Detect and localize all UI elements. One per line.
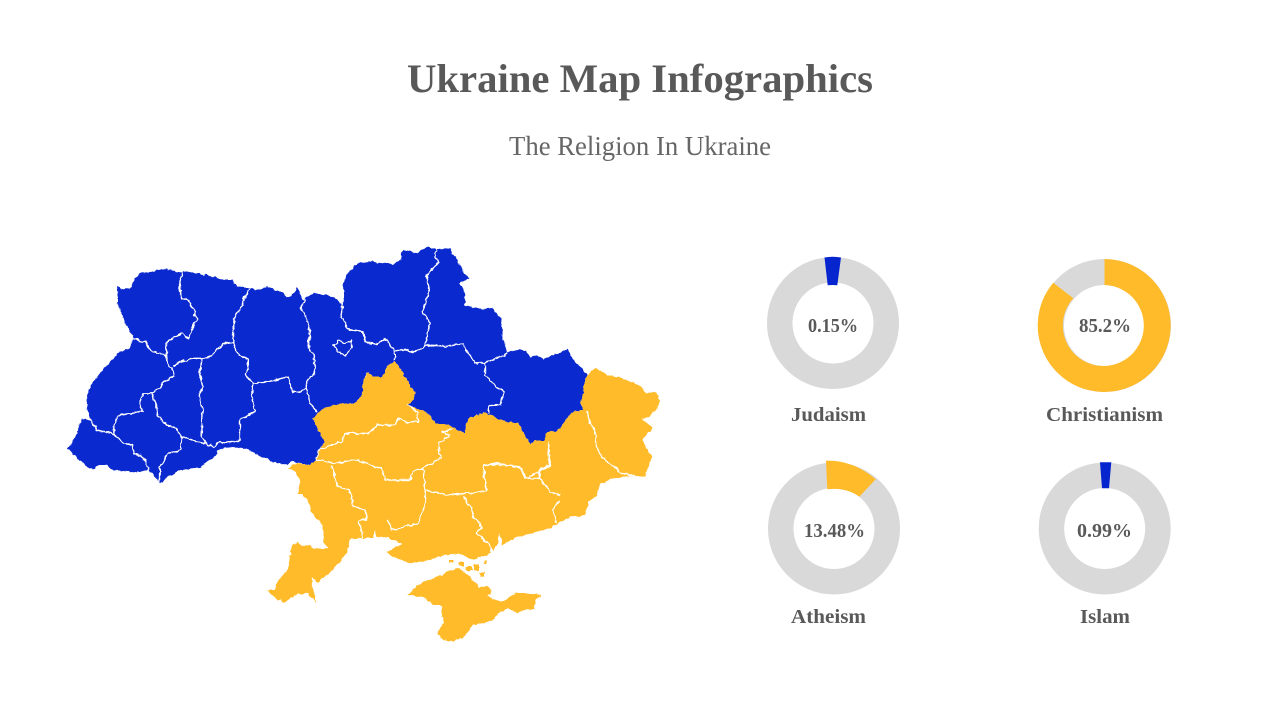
- value: 0.15%: [808, 315, 858, 337]
- title: Ukraine Map Infographics: [407, 56, 873, 101]
- donut: Christianism: [1038, 259, 1171, 426]
- Crimea peninsula: [407, 568, 542, 642]
- ring: [1038, 259, 1171, 392]
- donut: Atheism: [768, 461, 900, 628]
- yellow oblast borders: [317, 404, 452, 480]
- label: Atheism: [791, 606, 866, 628]
- slice: [1038, 259, 1171, 392]
- ring: [767, 257, 899, 389]
- map region: blue oblasts: [68, 247, 587, 483]
- value: 13.48%: [804, 520, 865, 542]
- value: 0.99%: [1077, 520, 1132, 542]
- blue oblast borders: [92, 272, 372, 482]
- Sivash shore islets: [449, 560, 487, 577]
- map region: yellow oblasts: [267, 362, 659, 642]
- subtitle: The Religion In Ukraine: [509, 131, 771, 161]
- map of Ukraine: [68, 247, 659, 642]
- label: Islam: [1080, 606, 1130, 628]
- slice: [1100, 462, 1111, 488]
- ring: [768, 462, 900, 594]
- donut: Judaism: [767, 257, 899, 426]
- donut: Islam: [1039, 462, 1171, 628]
- value: 85.2%: [1079, 315, 1131, 337]
- slice: [824, 257, 841, 285]
- label: Judaism: [791, 404, 866, 426]
- label: Christianism: [1046, 404, 1163, 426]
- slice: [826, 461, 876, 497]
- ring: [1039, 462, 1171, 594]
